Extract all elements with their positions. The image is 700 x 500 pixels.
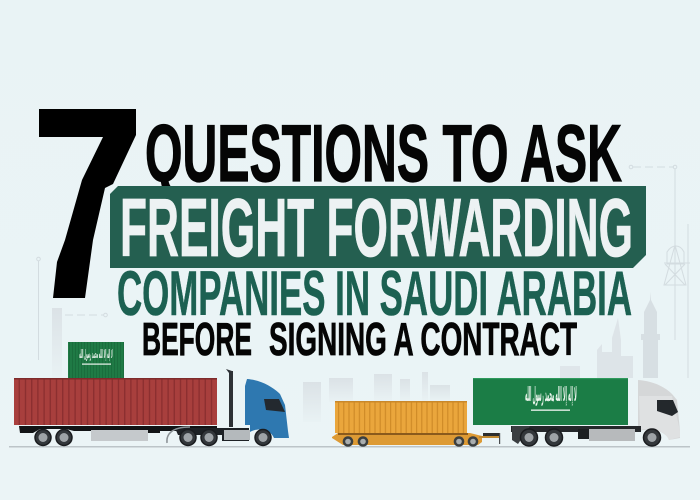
truck: green flag container with white cab: لا إله إلا الله محمد رسول الله <box>525 384 577 407</box>
fuel tank <box>589 429 635 441</box>
background skyline and blueprint lines <box>37 165 690 422</box>
wheels <box>35 430 271 446</box>
white cab <box>638 380 680 440</box>
red container <box>14 378 217 425</box>
cab window <box>657 400 678 416</box>
fuel tank <box>91 430 148 441</box>
exhaust stack <box>229 371 233 427</box>
small green flag container <box>68 342 124 378</box>
chassis <box>19 426 217 433</box>
green flag container <box>473 378 628 425</box>
yellow container trailer <box>332 401 500 447</box>
wheels <box>520 429 660 446</box>
cab window <box>264 399 285 412</box>
heading: before signing a contract: BEFORE <box>142 313 252 365</box>
small green flag container: لا إله إلا الله محمد رسول الله <box>79 348 113 362</box>
number 7 <box>39 109 136 298</box>
battery box <box>224 430 250 440</box>
heading: before signing a contract <box>142 313 577 365</box>
ground line <box>9 446 690 448</box>
blue cab <box>245 379 289 438</box>
truck: red container with blue cab <box>14 369 289 446</box>
chassis <box>511 426 641 432</box>
truck: green flag container with white cab <box>473 378 680 446</box>
